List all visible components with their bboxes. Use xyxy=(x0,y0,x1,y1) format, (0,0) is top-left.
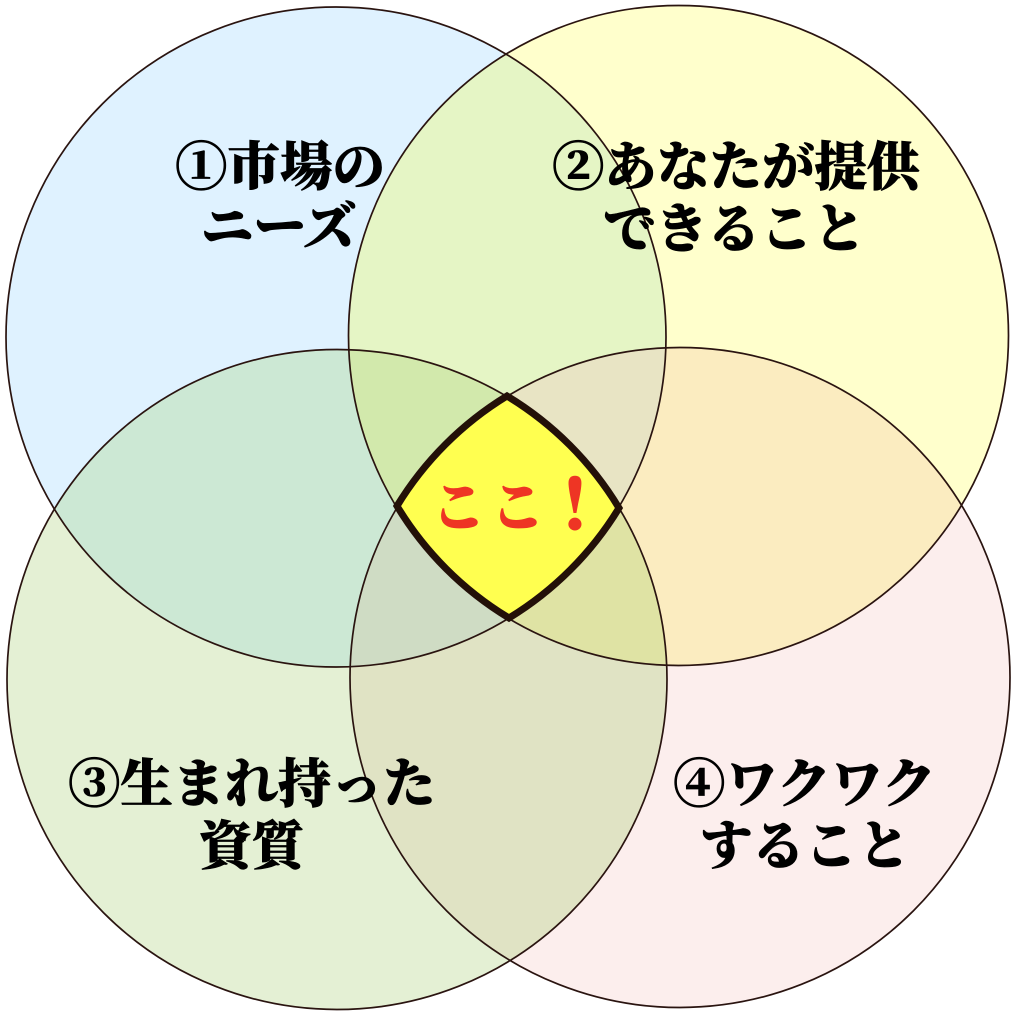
label: market needs: ①市場の xyxy=(175,139,385,197)
overlap: left xyxy=(56,350,395,666)
circle: innate qualities xyxy=(7,350,667,1010)
overlap: lower left triple xyxy=(351,512,504,666)
overlap: bottom xyxy=(350,620,666,960)
label: excitement: すること xyxy=(700,818,910,876)
center highlight xyxy=(397,396,619,618)
label: what you can offer: ②あなたが提供 xyxy=(552,139,924,197)
overlap: lower right triple xyxy=(512,512,666,664)
label: here: こ xyxy=(491,478,545,538)
overlap: right xyxy=(621,348,960,665)
circle: what you can offer xyxy=(348,6,1008,666)
circle: excitement xyxy=(350,348,1010,1008)
label: excitement: ④ワクワク xyxy=(673,756,936,814)
overlap: top xyxy=(350,55,665,394)
overlap: upper right triple xyxy=(512,349,665,503)
label: innate qualities: ③生まれ持った xyxy=(68,756,436,814)
circle: market needs xyxy=(6,7,666,667)
label: what you can offer: できること xyxy=(603,201,866,259)
label: here: こ xyxy=(432,478,486,538)
label: market needs: ニーズ xyxy=(201,199,356,257)
label: here: ！ xyxy=(541,468,609,544)
label: innate qualities: 資質 xyxy=(199,818,312,876)
overlap: upper left triple xyxy=(350,350,502,502)
